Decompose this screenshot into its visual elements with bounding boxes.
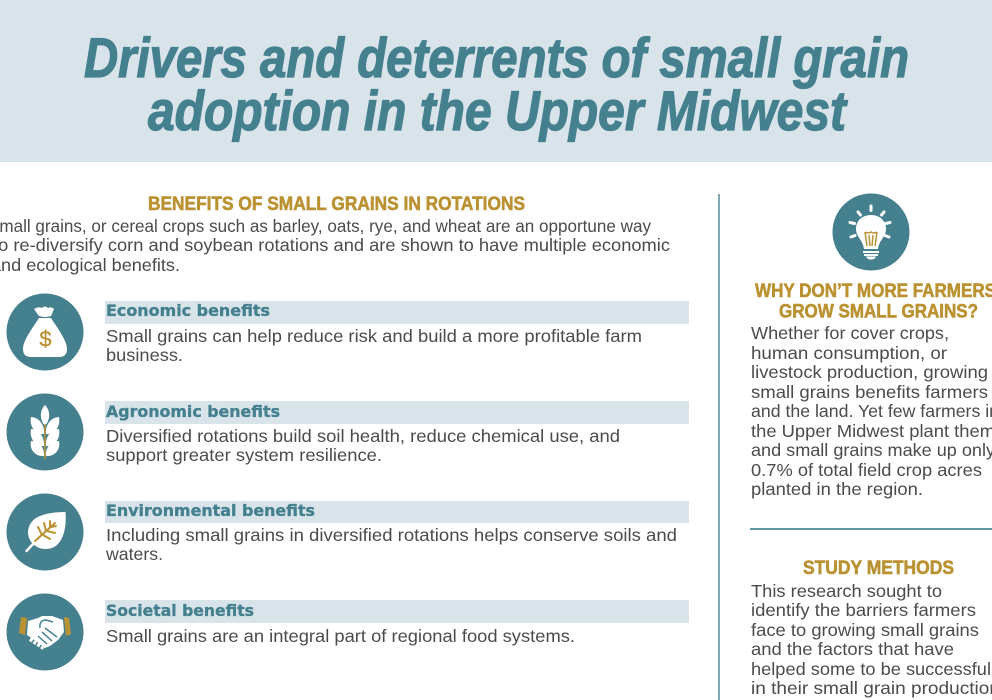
- environmental text: waters.: [105, 544, 163, 564]
- text: why don't more farmers: small grains benefits farmers: [751, 382, 988, 402]
- icon: handshake: [6, 594, 84, 670]
- text: study methods: and the factors that have: [751, 639, 954, 659]
- icon: leaf: [6, 494, 84, 570]
- economic label bar: Economic benefits: [106, 301, 270, 320]
- text: why don't more farmers: human consumption, or: [751, 343, 947, 363]
- environmental text: [105, 525, 677, 564]
- agronomic label bar: [105, 401, 689, 424]
- heading: benefits: BENEFITS OF SMALL GRAINS IN ROTATIONS: [148, 193, 525, 215]
- environmental text: Including small grains in diversified rotations helps conserve soils and: [106, 525, 677, 545]
- panel: why don't more farmers: [751, 194, 992, 499]
- text: why don't more farmers: livestock production, growing: [751, 362, 988, 382]
- agronomic text: Diversified rotations build soil health, reduce chemical use, and: [106, 426, 620, 446]
- economic text: Small grains can help reduce risk and build a more profitable farm: [106, 326, 642, 346]
- text: why don't more farmers: and small grains make up only: [751, 440, 992, 460]
- heading: why don't more farmers: [755, 280, 992, 322]
- text: why don't more farmers: [751, 323, 992, 499]
- societal label bar: Societal benefits: [106, 601, 254, 620]
- text: study methods: identify the barriers farmers: [751, 600, 976, 620]
- title banner: [0, 0, 992, 162]
- intro text: Small grains, or cereal crops such as barley, oats, rye, and wheat are an opportune way: [0, 216, 651, 236]
- environmental label bar: Environmental benefits: [106, 501, 315, 520]
- text: study methods: [751, 581, 992, 698]
- economic text: business.: [106, 345, 183, 365]
- title: [84, 26, 909, 142]
- icon: money bag: $: [39, 326, 52, 352]
- societal text: Small grains are an integral part of regional food systems.: [106, 626, 575, 646]
- text: why don't more farmers: Whether for cover crops,: [751, 323, 949, 343]
- icon: wheat: [6, 394, 84, 470]
- text: study methods: in their small grain production: [751, 678, 992, 698]
- economic label bar: [105, 301, 689, 324]
- text: study methods: face to growing small grains: [751, 620, 979, 640]
- text: why don't more farmers: 0.7% of total field crop acres: [751, 460, 982, 480]
- text: study methods: helped some to be successful: [751, 659, 991, 679]
- environmental label bar: [105, 501, 689, 523]
- intro text: to re-diversify corn and soybean rotations and are shown to have multiple economic: [0, 235, 670, 255]
- societal benefits row: [6, 594, 689, 670]
- text: why don't more farmers: the Upper Midwest plant them: [751, 421, 992, 441]
- icon: light bulb: [832, 194, 910, 270]
- environmental benefits row: [6, 494, 689, 570]
- text: why don't more farmers: and the land. Yet few farmers in: [751, 401, 992, 421]
- agronomic text: support greater system resilience.: [106, 445, 382, 465]
- panel: study methods: [751, 557, 992, 698]
- title: adoption in the Upper Midwest: [148, 79, 848, 142]
- intro text: [0, 216, 670, 275]
- agronomic label bar: Agronomic benefits: [106, 402, 280, 421]
- panel: benefits of small grains: [0, 193, 689, 670]
- icon: money bag: [6, 294, 84, 370]
- economic benefits row: [6, 294, 689, 370]
- societal label bar: [105, 600, 689, 623]
- text: why don't more farmers: planted in the region.: [751, 479, 923, 499]
- agronomic benefits row: [6, 394, 689, 470]
- text: study methods: This research sought to: [751, 581, 942, 601]
- agronomic text: [106, 426, 620, 465]
- economic text: [106, 326, 642, 365]
- heading: study methods: STUDY METHODS: [803, 557, 954, 579]
